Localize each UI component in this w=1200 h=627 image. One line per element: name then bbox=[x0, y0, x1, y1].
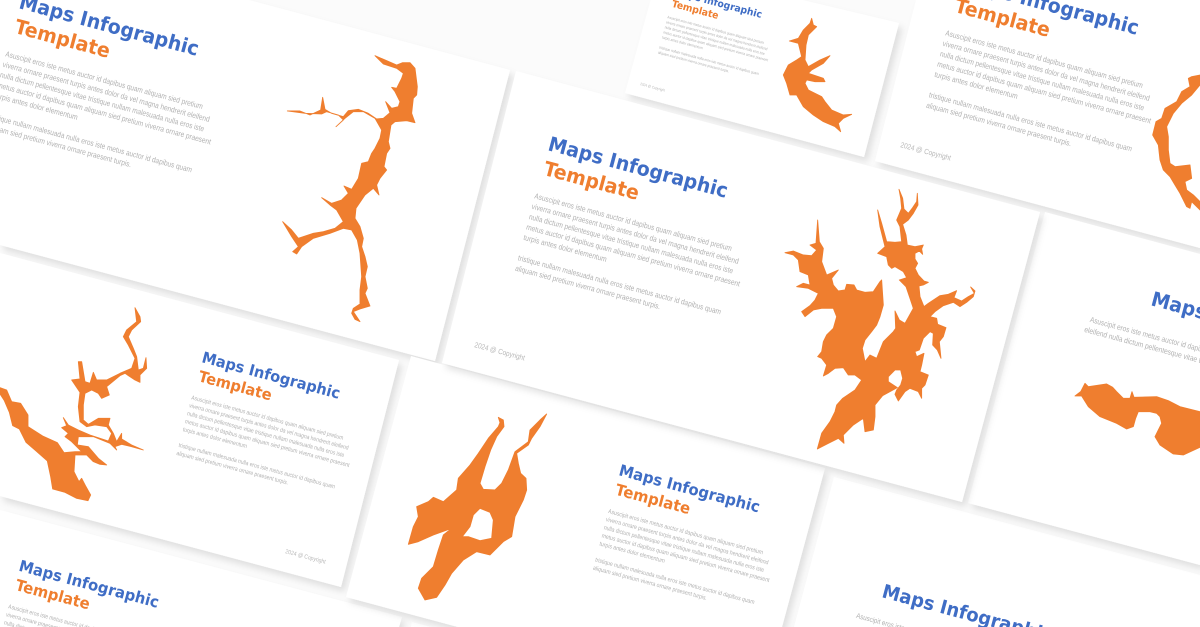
panel: slide right bbox=[968, 212, 1200, 565]
panel: slide bottom left bbox=[0, 510, 402, 627]
text block: left middle slide: nulla dictum pellentesque vitae tristique nullam malesuada nulla eros iste bbox=[186, 411, 345, 459]
text block: bottom centre slide: nulla dictum pellentesque vitae tristique nullam malesuada nulla eros iste bbox=[603, 524, 765, 574]
text block: left middle slide: Asuscipit eros iste metus auctor id dapibus quam aliquam sied pretium bbox=[191, 395, 344, 442]
text block: top right slide: metus auctor id dapibus quam aliquam sied pretium viverra ornare praesent bbox=[936, 60, 1153, 126]
panel: slide bottom centre sliver bbox=[411, 622, 431, 627]
text block: top right slide: nulla dictum pellentesque vitae tristique nullam malesuada nulla eros iste bbox=[939, 49, 1145, 113]
text block: top small slide: tristique nullam malesuada nulla eros iste metus auctor id dapibus quam bbox=[659, 46, 759, 76]
text block: top right slide bbox=[925, 0, 1177, 167]
text block: left middle slide: turpis antes dolor elementum bbox=[182, 427, 248, 450]
heading and body text: centre slide: Template bbox=[541, 156, 642, 205]
text block: left middle slide: aliquam sied pretium viverra ornare praesent turpis. bbox=[176, 451, 289, 487]
panel: slide top right bbox=[875, 0, 1200, 248]
text block: bottom centre slide: metus auctor id dapibus quam aliquam sied pretium viverra ornare praesent bbox=[601, 532, 770, 584]
text block: left middle slide: viverra ornare praesent turpis antes dolor da vel magna hendrerit eleifend bbox=[188, 403, 349, 452]
text block: top small slide: turpis antes dolor elementum bbox=[661, 36, 703, 50]
copyright: 2024 @ Copyright bbox=[284, 549, 326, 566]
copyright: 2024 @ Copyright bbox=[473, 340, 527, 363]
heading and body text: centre slide: tristique nullam malesuada nulla eros iste metus auctor id dapibus quam bbox=[517, 253, 722, 316]
copyright: 2024 @ Copyright bbox=[899, 140, 953, 163]
text block: top small slide: metus auctor id dapibus quam aliquam sied pretium viverra ornare praesent bbox=[663, 30, 769, 63]
panel: slide top left bbox=[0, 0, 510, 361]
heading and body text: centre slide: turpis antes dolor elementum bbox=[522, 233, 608, 264]
text block: top left slide: Template bbox=[12, 14, 113, 63]
map: left middle lake bbox=[0, 308, 147, 501]
heading and body text: centre slide bbox=[514, 132, 766, 330]
text block: top small slide: Asuscipit eros iste metus auctor id dapibus quam aliquam sied pretium bbox=[667, 15, 764, 45]
text block: bottom centre slide: turpis antes dolor elementum bbox=[599, 541, 666, 565]
text block: bottom centre slide: tristique nullam malesuada nulla eros iste metus auctor id dapibus quam bbox=[594, 557, 755, 606]
panel: slide left middle bbox=[0, 253, 399, 587]
text block: top small slide bbox=[657, 0, 781, 83]
text block: bottom centre slide bbox=[592, 461, 790, 616]
heading and body text: centre slide: metus auctor id dapibus quam aliquam sied pretium viverra ornare praesent bbox=[525, 223, 742, 289]
text block: top right slide: aliquam sied pretium viverra ornare praesent turpis. bbox=[925, 101, 1072, 148]
copyright: 2024 @ Copyright bbox=[640, 82, 665, 93]
text block: bottom centre slide: Template bbox=[613, 480, 693, 518]
text block: right slide bbox=[1083, 272, 1200, 396]
text block: top left slide: nulla dictum pellentesque vitae tristique nullam malesuada nulla eros iste bbox=[0, 70, 205, 134]
text block: bottom left slide: Template bbox=[13, 576, 92, 613]
text block: bottom centre slide: Asuscipit eros iste metus auctor id dapibus quam aliquam sied pretium bbox=[607, 508, 764, 556]
heading and body text: centre slide: aliquam sied pretium viverra ornare praesent turpis. bbox=[514, 264, 661, 311]
text block: top left slide: Asuscipit eros iste metus auctor id dapibus quam aliquam sied pretium bbox=[5, 50, 204, 111]
map: top small lake bbox=[783, 18, 852, 132]
text block: top left slide: viverra ornare praesent turpis antes dolor da vel magna hendrerit eleifend bbox=[2, 60, 211, 124]
panel: slide bottom right bbox=[794, 477, 1200, 627]
text block: top right slide: tristique nullam malesuada nulla eros iste metus auctor id dapibus quam bbox=[928, 90, 1133, 153]
panel: slide centre main bbox=[442, 71, 1040, 502]
map: top left lake bbox=[283, 56, 417, 322]
text block: bottom left slide bbox=[3, 557, 183, 627]
heading and body text: centre slide: nulla dictum pellentesque vitae tristique nullam malesuada nulla eros iste bbox=[528, 212, 734, 276]
text block: top right slide: Asuscipit eros iste metus auctor id dapibus quam aliquam sied pretium bbox=[945, 29, 1144, 90]
map: top right lake bbox=[1153, 75, 1200, 210]
map: right lake bbox=[1075, 383, 1200, 455]
text block: top left slide: metus auctor id dapibus quam aliquam sied pretium viverra ornare praesent bbox=[0, 81, 213, 147]
text block: left middle slide: Maps Infographic bbox=[200, 348, 342, 403]
text block: left middle slide: Template bbox=[196, 367, 274, 404]
panel: slide bottom centre bbox=[346, 356, 825, 627]
text block: top right slide: viverra ornare praesent turpis antes dolor da vel magna hendrerit eleifend bbox=[942, 39, 1151, 103]
text block: top small slide: aliquam sied pretium viverra ornare praesent turpis. bbox=[657, 51, 729, 74]
heading and body text: centre slide: Maps Infographic bbox=[546, 132, 731, 203]
text block: top small slide: viverra ornare praesent turpis antes dolor da vel magna hendrerit eleifend bbox=[666, 20, 768, 51]
text block: left middle slide bbox=[176, 348, 369, 501]
text block: bottom left slide: Maps Infographic bbox=[17, 557, 161, 612]
map: centre lake bbox=[785, 189, 975, 449]
heading and body text: centre slide: Asuscipit eros iste metus auctor id dapibus quam aliquam sied pretium bbox=[534, 192, 733, 253]
text block: top right slide: turpis antes dolor elementum bbox=[933, 70, 1019, 101]
text block: bottom centre slide: aliquam sied pretium viverra ornare praesent turpis. bbox=[592, 565, 708, 602]
heading and body text: centre slide: viverra ornare praesent turpis antes dolor da vel magna hendrerit eleifend bbox=[531, 202, 740, 266]
text block: top left slide bbox=[0, 0, 237, 188]
text block: left middle slide: tristique nullam malesuada nulla eros iste metus auctor id dapibus quam bbox=[178, 443, 336, 491]
text block: top small slide: nulla dictum pellentesque vitae tristique nullam malesuada nulla eros iste bbox=[664, 25, 765, 56]
panel: slide top small bbox=[625, 0, 899, 157]
text block: bottom centre slide: Maps Infographic bbox=[617, 461, 762, 516]
map: bottom centre lake bbox=[408, 414, 547, 600]
text block: left middle slide: metus auctor id dapibus quam aliquam sied pretium viverra ornare praesent bbox=[184, 419, 350, 469]
text block: bottom centre slide: viverra ornare praesent turpis antes dolor da vel magna hendrerit eleifend bbox=[605, 516, 769, 566]
